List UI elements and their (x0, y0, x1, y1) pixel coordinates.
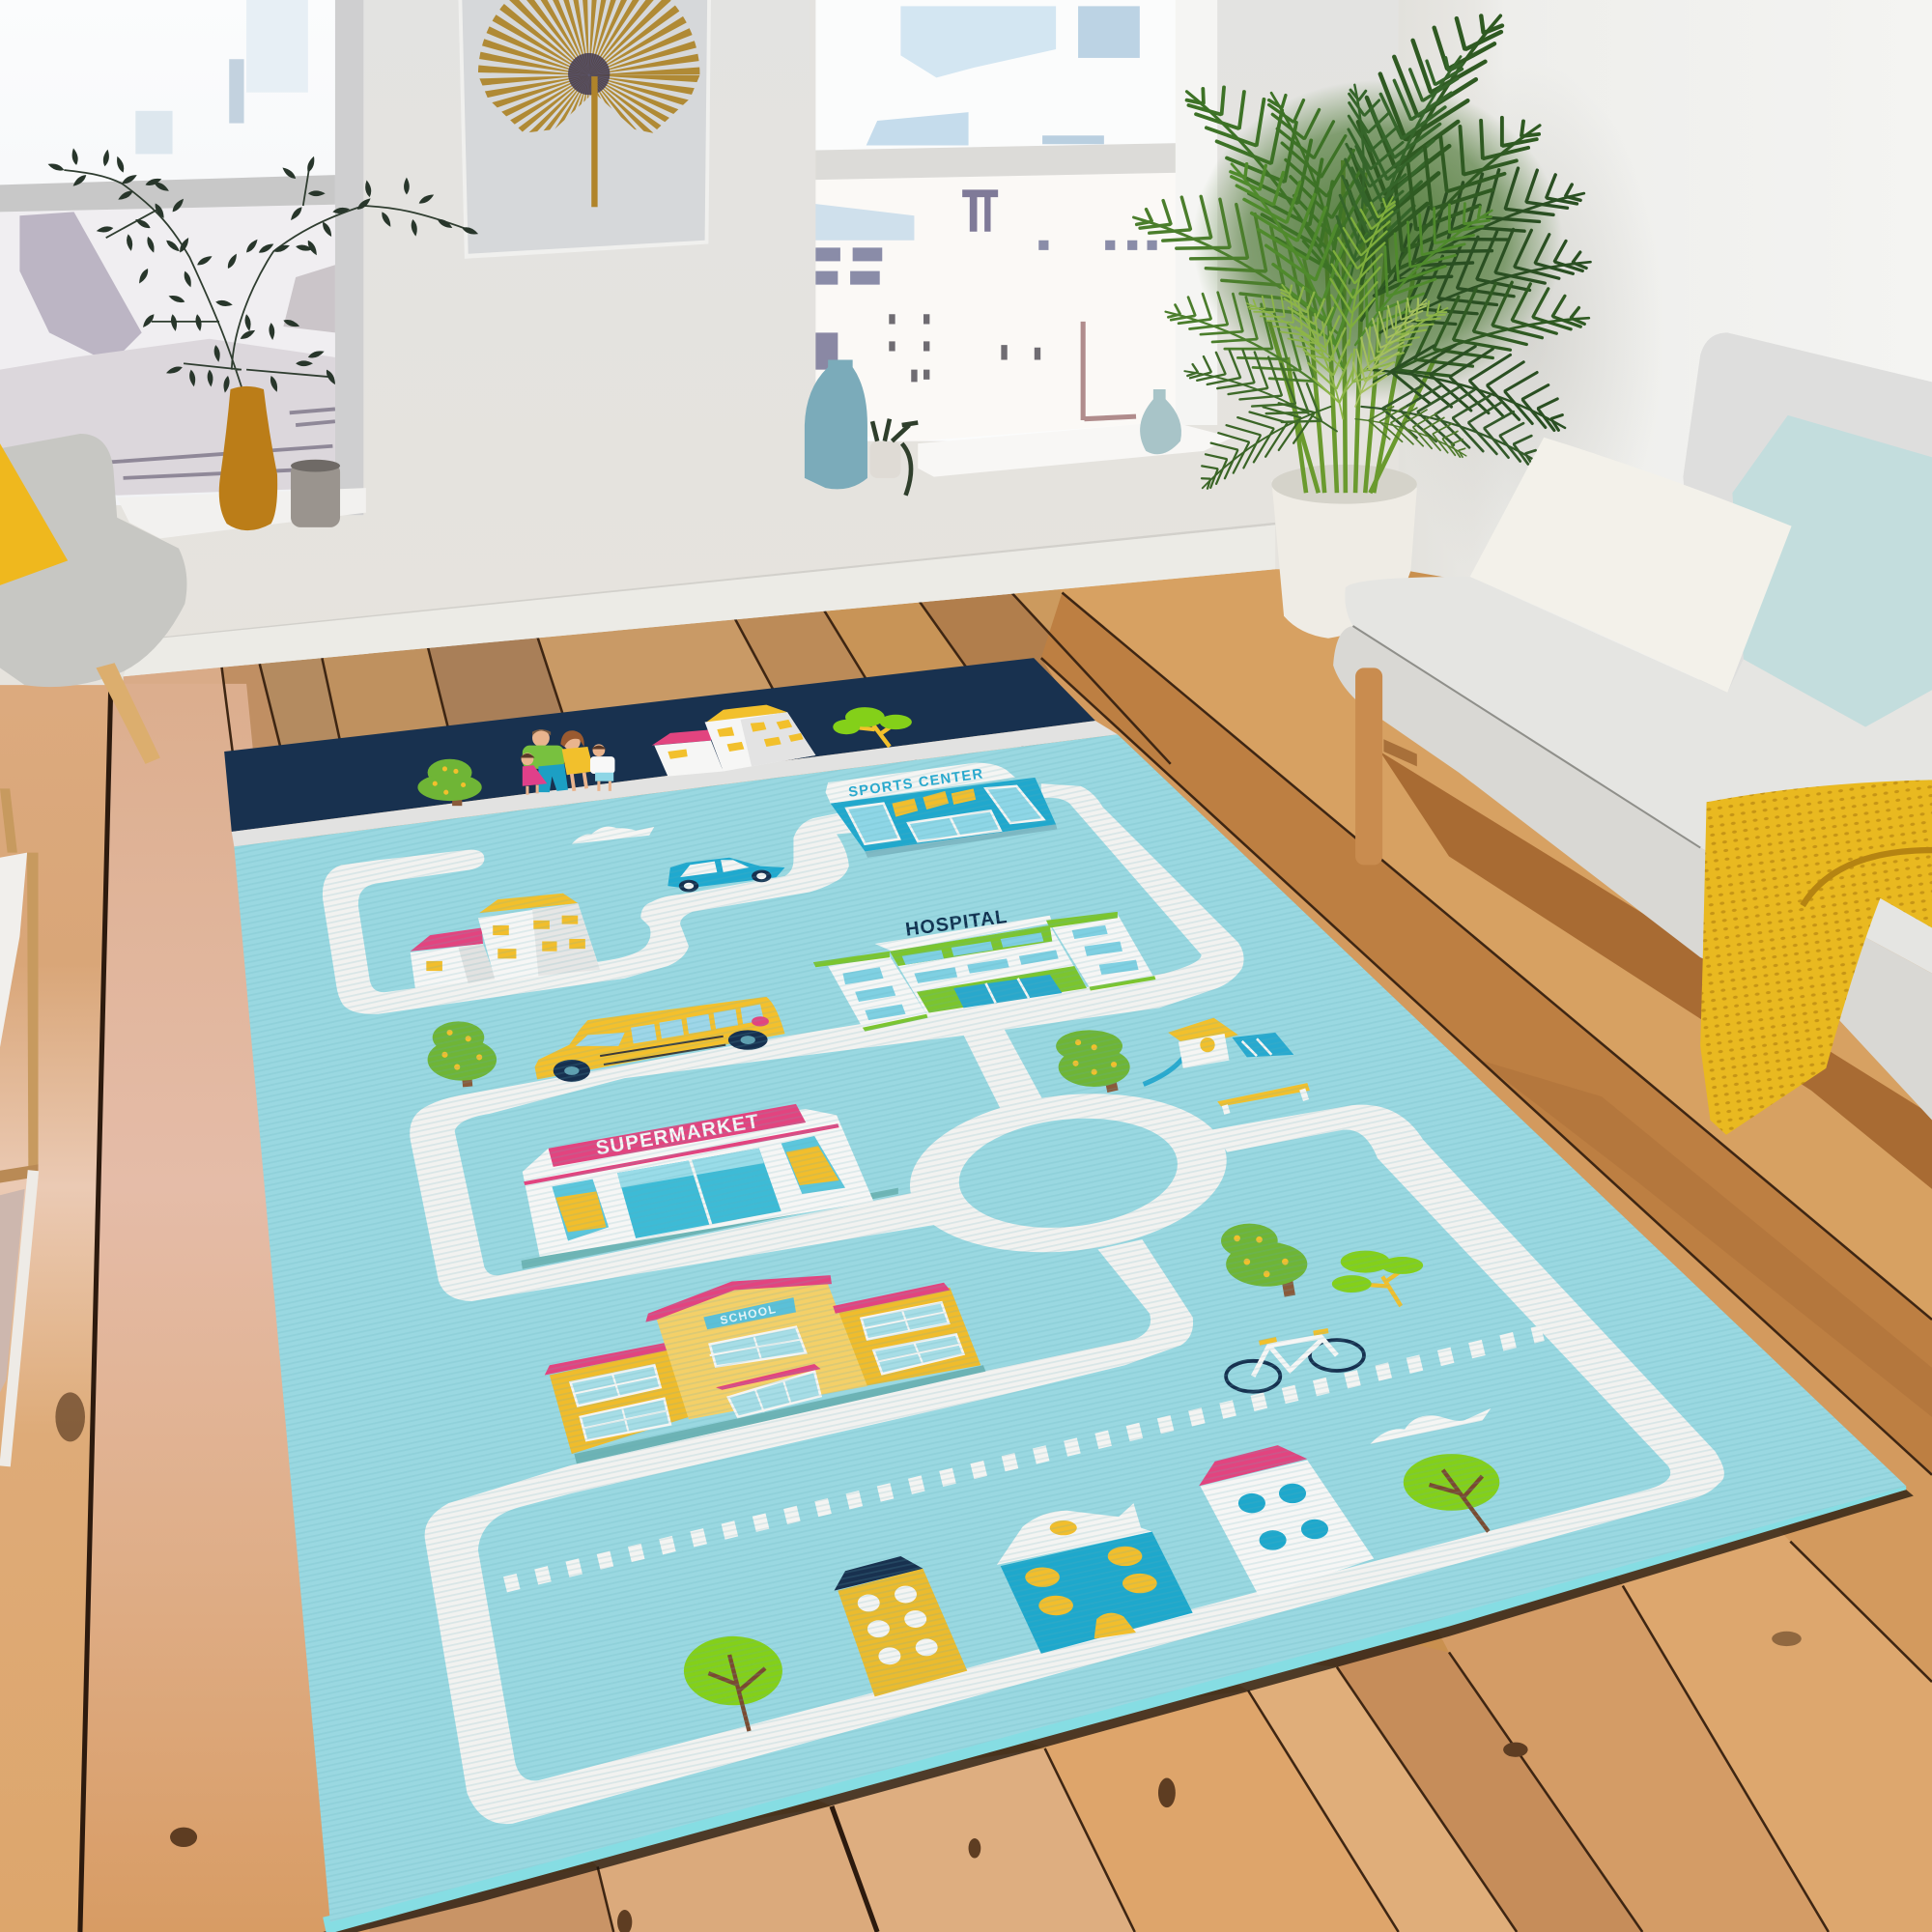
bottom planks (330, 1602, 1642, 1932)
wooden floor (0, 542, 1932, 1932)
navy band yellow tree (833, 707, 912, 747)
rug rib texture (222, 727, 1922, 1932)
supermarket sign: SUPERMARKET (594, 1111, 761, 1160)
roads (323, 783, 1724, 1824)
round tree bottom left (684, 1636, 782, 1731)
plank seams (206, 542, 1932, 1932)
tree by school bus (428, 1021, 497, 1087)
house on upper road (411, 894, 600, 988)
bench (1217, 1083, 1310, 1114)
navy band house (652, 705, 815, 777)
yellow apartment building (835, 1556, 967, 1696)
pink roof white house (1199, 1445, 1374, 1597)
armchair with yellow pillow (0, 434, 186, 853)
left planks (80, 684, 370, 1932)
girl (520, 753, 547, 795)
right window (810, 0, 1233, 477)
bicycle (1226, 1331, 1364, 1392)
school (545, 1275, 985, 1463)
sports center sign: SPORTS CENTER (847, 766, 984, 801)
sports center (826, 763, 1057, 858)
side table (0, 853, 39, 1466)
left window (0, 0, 366, 538)
boy (590, 744, 614, 791)
wall poster with gold palm leaf (458, 0, 711, 259)
knots (55, 1392, 1802, 1932)
playground (1144, 1018, 1293, 1084)
dotted path (505, 1333, 1543, 1584)
wall (0, 0, 1932, 788)
potted palm plant (1132, 0, 1592, 639)
rug teal field (234, 734, 1906, 1922)
dad (523, 729, 568, 792)
rug shadow and rim (323, 1486, 1914, 1932)
blue domed building (997, 1503, 1193, 1654)
rug grey kerb strip (232, 721, 1118, 846)
hospital (813, 906, 1155, 1032)
top planks (107, 542, 1233, 764)
sofa with pillows and blanket (1333, 332, 1932, 1135)
left plant with amber vase (47, 148, 479, 530)
round tree bottom right (1404, 1454, 1499, 1531)
vases on right window sill (805, 359, 1181, 496)
tree by playground (1056, 1030, 1130, 1093)
school bus (535, 997, 784, 1082)
rug navy top band (224, 658, 1095, 832)
family (520, 729, 614, 795)
hospital sign: HOSPITAL (904, 906, 1009, 941)
far right planks (1002, 542, 1932, 1932)
play rug (222, 658, 1922, 1932)
y branch tree (1332, 1251, 1423, 1306)
clouds (572, 827, 1491, 1444)
mum (560, 730, 594, 791)
supermarket (522, 1104, 898, 1269)
orchard tree (1221, 1224, 1307, 1297)
school sign: SCHOOL (719, 1302, 778, 1327)
navy band tree left (417, 759, 482, 806)
car (668, 858, 784, 892)
